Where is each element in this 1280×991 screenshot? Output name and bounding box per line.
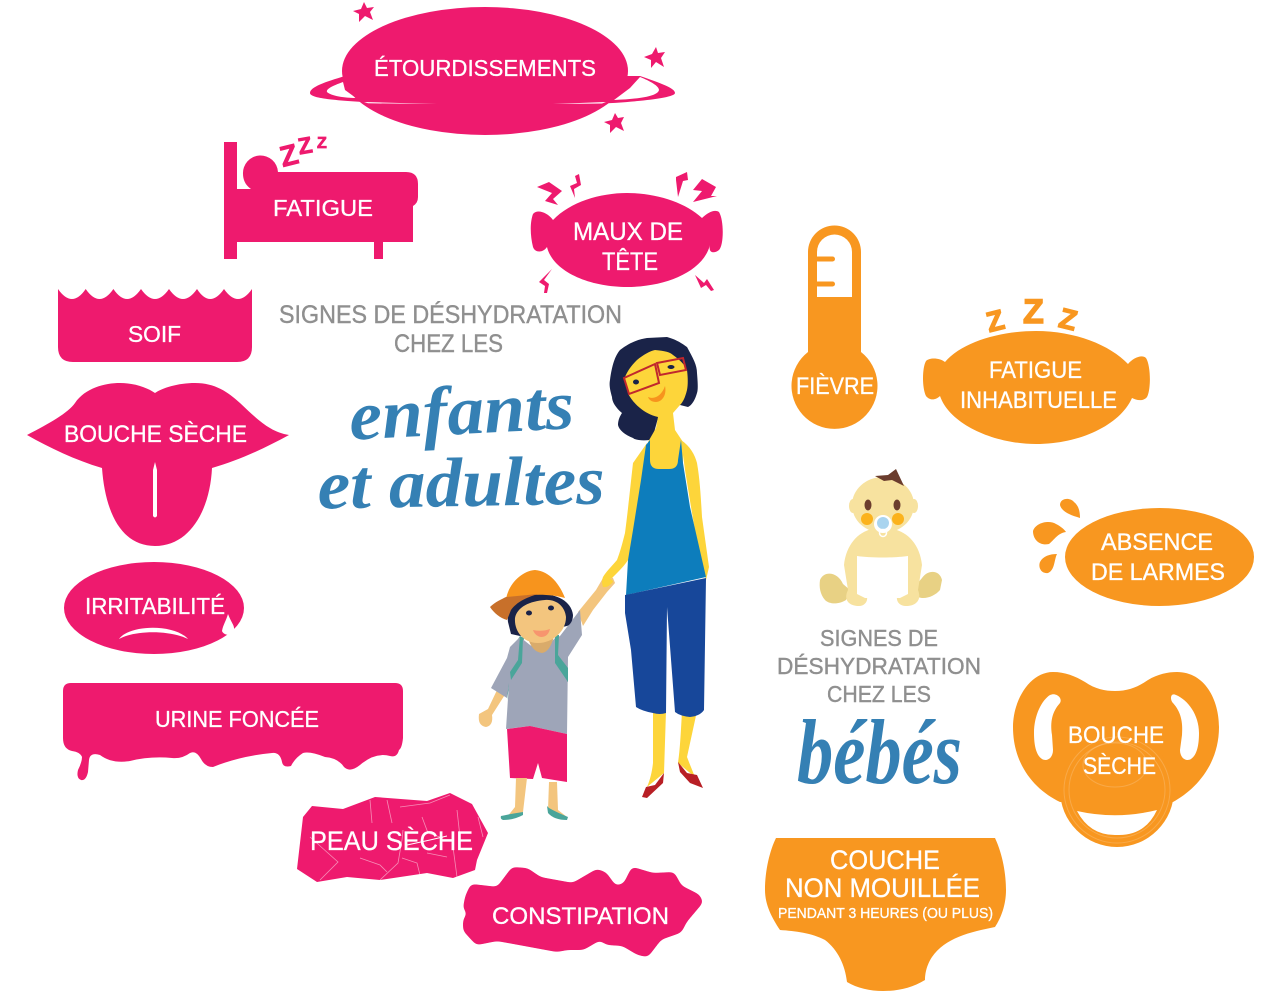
symptom: fatigue inhabituelle xyxy=(923,293,1150,444)
label: MAUX DE xyxy=(573,218,683,246)
label: CONSTIPATION xyxy=(492,903,669,930)
icon: zzz: Z xyxy=(983,304,1007,338)
label: URINE FONCÉE xyxy=(155,706,319,732)
raised arm xyxy=(578,578,615,626)
illustration: child xyxy=(479,570,615,820)
symptom: soif xyxy=(58,289,252,362)
illustration: baby xyxy=(820,469,942,606)
label: FATIGUE xyxy=(273,195,373,221)
tongue line xyxy=(153,462,157,518)
cracked skin shape xyxy=(297,793,488,882)
illustration: mother xyxy=(602,337,709,798)
label xyxy=(1068,722,1164,780)
capri pants xyxy=(625,578,706,717)
symptom: maux de tête xyxy=(531,172,723,293)
diaper xyxy=(857,556,908,598)
symptom: peau sèche xyxy=(297,793,488,882)
symptom: couche non mouillée xyxy=(765,838,1006,991)
icon: thermometer xyxy=(792,226,878,429)
label: SÈCHE xyxy=(1083,753,1156,780)
shorts xyxy=(507,726,567,782)
symptom: bouche sèche (bébés) xyxy=(1013,672,1219,847)
lower arm xyxy=(479,688,506,727)
label xyxy=(1091,529,1225,586)
icon: tear drops xyxy=(1033,499,1080,573)
legs xyxy=(507,778,567,817)
icon: zzz xyxy=(983,293,1080,338)
face xyxy=(515,600,566,643)
backpack straps xyxy=(510,635,568,682)
icon: planet ring xyxy=(310,7,675,135)
label: ABSENCE xyxy=(1101,529,1213,556)
icon: bed xyxy=(224,142,418,259)
icon: zzz: Z xyxy=(1056,302,1080,336)
label: BOUCHE SÈCHE xyxy=(64,421,247,448)
script word: et adultes: et adultes xyxy=(317,442,605,524)
head xyxy=(852,477,914,533)
arms xyxy=(602,440,709,587)
label: IRRITABILITÉ xyxy=(85,593,225,619)
legs xyxy=(647,711,697,787)
symptom: urine foncée xyxy=(63,683,403,780)
script word: enfants: enfants xyxy=(347,367,576,456)
symptom: irritabilité xyxy=(64,562,244,654)
hair xyxy=(508,594,573,636)
cap dome xyxy=(506,570,565,599)
label: INHABITUELLE xyxy=(960,387,1117,414)
label: DE LARMES xyxy=(1091,559,1225,586)
intro text: CHEZ LES xyxy=(394,330,503,358)
eyes xyxy=(864,500,900,510)
label: TÊTE xyxy=(602,247,658,276)
crack over label xyxy=(407,836,447,845)
icon: lightning bolts xyxy=(537,172,717,293)
label: BOUCHE xyxy=(1068,722,1164,749)
tear xyxy=(222,614,234,635)
cap brim xyxy=(490,594,538,620)
heading: enfants et adultes xyxy=(279,300,622,524)
intro text: CHEZ LES xyxy=(827,681,931,707)
symptom: fièvre xyxy=(792,226,878,429)
face, neck and chest xyxy=(625,350,688,472)
dripping shape xyxy=(63,683,403,780)
icon: zzz: Z xyxy=(277,139,302,174)
symptom: fatigue xyxy=(224,131,418,259)
mouth xyxy=(533,629,550,637)
symptom: constipation xyxy=(465,869,701,955)
t-shirt xyxy=(491,610,582,734)
intro text: SIGNES DE xyxy=(820,625,938,651)
label: PEAU SÈCHE xyxy=(310,826,473,856)
icon: lips and tongue xyxy=(27,383,289,546)
hair tuft xyxy=(875,469,904,486)
intro text xyxy=(777,625,981,707)
backpack xyxy=(507,635,568,700)
glasses xyxy=(624,358,686,394)
symptom: bouche sèche (enfants) xyxy=(27,383,289,546)
blob shape xyxy=(465,869,701,955)
heading: bébés xyxy=(777,625,981,803)
frown xyxy=(119,628,188,639)
tank top xyxy=(626,440,706,595)
icon: zzz: Z xyxy=(317,135,327,152)
symptom: étourdissements xyxy=(310,2,675,135)
cheeks xyxy=(861,513,904,525)
eye shape xyxy=(1065,508,1254,606)
head shape xyxy=(531,193,723,287)
label xyxy=(778,845,993,922)
sandals xyxy=(501,806,568,820)
face shape xyxy=(64,562,244,654)
icon: zzz: Z xyxy=(1023,293,1044,331)
label xyxy=(960,357,1117,414)
water shape xyxy=(58,289,252,362)
intro text: SIGNES DE DÉSHYDRATATION xyxy=(279,300,622,329)
shoes xyxy=(642,762,703,798)
eyes xyxy=(633,365,674,384)
label: NON MOUILLÉE xyxy=(785,873,980,903)
torso and arms xyxy=(844,529,922,606)
icon: stars xyxy=(353,2,665,133)
icon: zzz xyxy=(277,131,327,174)
candy-shaped body xyxy=(923,331,1150,444)
hair xyxy=(610,337,698,440)
neck xyxy=(528,636,554,653)
label: ÉTOURDISSEMENTS xyxy=(374,55,596,81)
label: COUCHE xyxy=(830,845,940,875)
label xyxy=(573,218,683,276)
icon: zzz: Z xyxy=(296,131,314,159)
pacifier xyxy=(874,515,892,536)
symptom: absence de larmes xyxy=(1033,499,1254,606)
label: SOIF xyxy=(128,321,181,347)
intro text xyxy=(279,300,622,358)
label: FIÈVRE xyxy=(796,373,874,400)
icon: pacifier xyxy=(1013,672,1219,847)
mouth xyxy=(648,386,665,402)
feet xyxy=(820,572,942,603)
icon: diaper xyxy=(765,838,1006,991)
script word: bébés: bébés xyxy=(797,701,962,803)
eyes xyxy=(526,606,554,616)
label: FATIGUE xyxy=(989,357,1082,384)
hand hold xyxy=(602,577,613,587)
ears xyxy=(849,499,918,513)
cracks xyxy=(310,795,483,880)
intro text: DÉSHYDRATATION xyxy=(777,653,981,679)
label: PENDANT 3 HEURES (OU PLUS) xyxy=(778,905,993,922)
